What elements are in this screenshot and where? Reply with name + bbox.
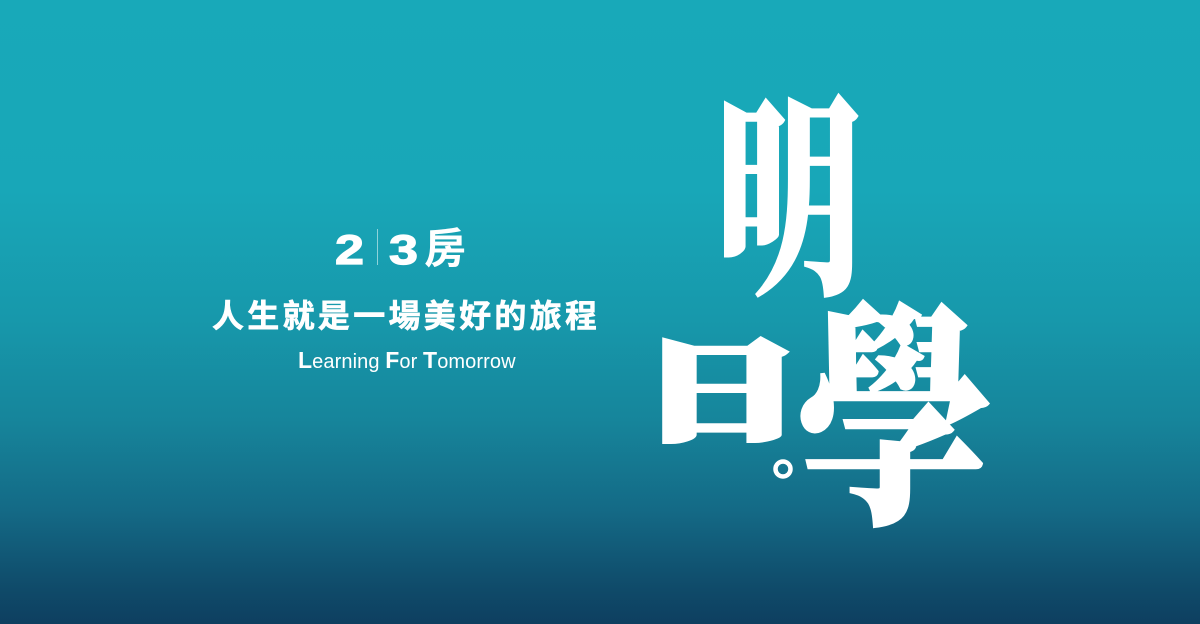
heading: 2|3房 [335, 225, 466, 273]
heading: 2|3房: 2 [335, 226, 364, 273]
icon: small circle [776, 462, 790, 476]
subtitle: 人生就是一場美好的旅程 [212, 298, 600, 334]
character 日: 日 [638, 305, 803, 463]
character 學: 學 [793, 232, 992, 573]
English tagline: Learning For Tomorrow [298, 347, 516, 373]
character 明: 明 [715, 31, 861, 338]
heading: 2|3房: 3 [389, 226, 418, 273]
heading: 2|3房: 房 [424, 225, 466, 272]
